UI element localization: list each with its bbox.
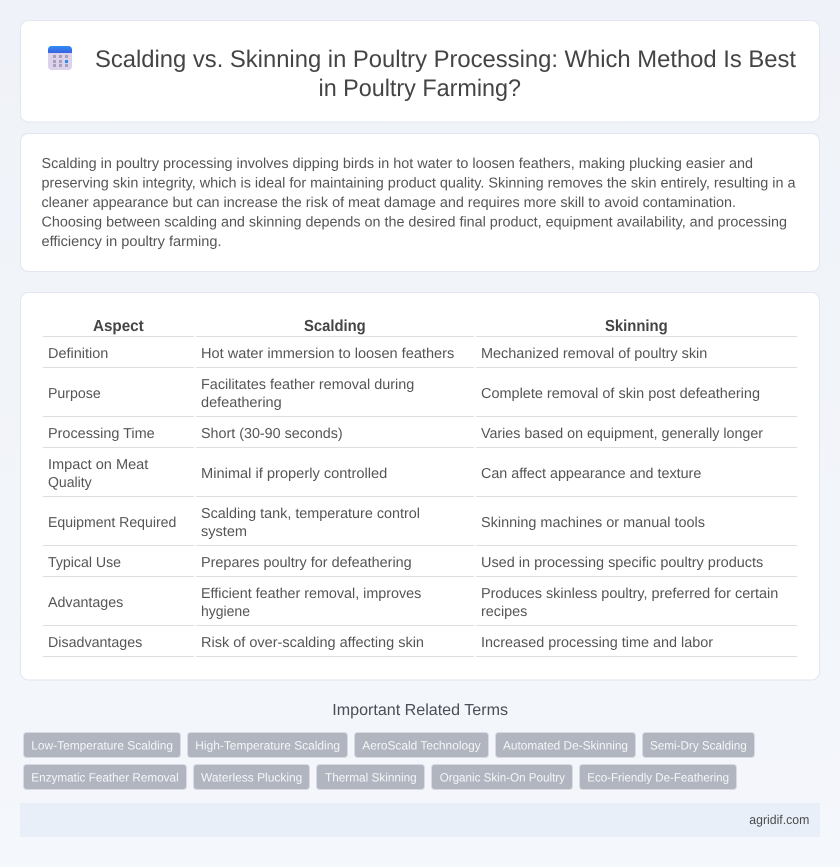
text block: introduction paragraph: [42, 156, 796, 250]
footer source label: agridif.com: [749, 812, 809, 827]
table row: equipment required: Scalding tank, temperature control: [201, 506, 420, 522]
table row: impact on meat quality: Impact on Meat: [48, 457, 148, 473]
panel: introduction: [20, 134, 820, 272]
table row: definition: Hot water immersion to loosen feathers: [201, 346, 454, 362]
tag: semi-dry scalding: Semi-Dry Scalding: [650, 738, 747, 752]
table row: impact on meat quality: [48, 457, 701, 491]
heading: important related terms: Important Related Terms: [332, 702, 508, 719]
tag: eco-friendly de-feathering: Eco-Friendly De-Feathering: [587, 770, 729, 784]
table row: typical use: Prepares poultry for defeathering: [201, 555, 412, 571]
tag: organic skin-on poultry: [432, 764, 572, 790]
table row: processing time: Short (30-90 seconds): [201, 426, 343, 442]
table row: definition: Mechanized removal of poultry skin: [481, 346, 707, 362]
table row: advantages: Produces skinless poultry, preferred for certain: [481, 586, 778, 602]
tag: automated de-skinning: Automated De-Skinning: [503, 738, 628, 752]
table row: impact on meat quality: Can affect appearance and texture: [481, 466, 701, 482]
table row: equipment required: Equipment Required: [48, 515, 176, 531]
table row: impact on meat quality: Quality: [48, 475, 92, 491]
tag: enzymatic feather removal: Enzymatic Feather Removal: [31, 770, 179, 784]
panel: title header: [20, 20, 820, 122]
tag: semi-dry scalding: [642, 732, 754, 758]
table row: disadvantages: Disadvantages: [48, 635, 142, 651]
table header row: Skinning: [605, 318, 668, 335]
table row: purpose: defeathering: [201, 395, 282, 411]
table header row: Aspect: [93, 318, 144, 335]
text block: introduction paragraph: efficiency in poultry farming.: [42, 234, 222, 250]
tag: low-temperature scalding: Low-Temperature Scalding: [31, 738, 173, 752]
title: in Poultry Farming?: [318, 75, 521, 102]
table row: typical use: Typical Use: [48, 555, 121, 571]
table row: advantages: Efficient feather removal, improves: [201, 586, 421, 602]
tag: high-temperature scalding: High-Temperature Scalding: [195, 738, 340, 752]
text block: introduction paragraph: Choosing between scalding and skinning depends on the desired final product, equipment availability, and processing: [42, 214, 787, 230]
table row: advantages: hygiene: [201, 604, 250, 620]
table row: equipment required: [48, 506, 705, 540]
table row: purpose: [48, 377, 760, 411]
footer bar: [20, 803, 820, 837]
table row: typical use: Used in processing specific poultry products: [481, 555, 763, 571]
table row: disadvantages: Increased processing time and labor: [481, 635, 713, 651]
tag: aeroscald technology: AeroScald Technology: [362, 738, 481, 752]
table row: impact on meat quality: Minimal if properly controlled: [201, 466, 387, 482]
tag: waterless plucking: Waterless Plucking: [201, 770, 302, 784]
icon: calendar: [48, 46, 72, 70]
table row: disadvantages: Risk of over-scalding affecting skin: [201, 635, 424, 651]
tag: organic skin-on poultry: Organic Skin-On Poultry: [440, 770, 565, 784]
table row: advantages: Advantages: [48, 595, 123, 611]
tag: aeroscald technology: [354, 732, 488, 758]
text block: introduction paragraph: Scalding in poultry processing involves dipping birds in hot water to loosen feathers, making plucking easier and: [42, 156, 753, 172]
table row: typical use: [48, 555, 763, 571]
tag: high-temperature scalding: [188, 732, 348, 758]
table row: purpose: Purpose: [48, 386, 101, 402]
text block: introduction paragraph: preserving skin integrity, which is ideal for maintaining product quality. Skinning removes the skin entirely, resulting in a: [42, 176, 796, 192]
table row: advantages: recipes: [481, 604, 527, 620]
table row: disadvantages: [48, 635, 713, 651]
title: [95, 46, 796, 102]
tag: eco-friendly de-feathering: [580, 764, 736, 790]
table row: advantages: [48, 586, 778, 620]
table row: processing time: [48, 426, 763, 442]
table row: equipment required: Skinning machines or manual tools: [481, 515, 705, 531]
panel: comparison table: [20, 292, 820, 680]
panel: related term tags: [24, 732, 754, 790]
tag: waterless plucking: [194, 764, 310, 790]
table row: definition: Definition: [48, 346, 108, 362]
tag: thermal skinning: Thermal Skinning: [325, 770, 417, 784]
table header row: [93, 318, 668, 335]
tag: automated de-skinning: [496, 732, 636, 758]
text block: introduction paragraph: cleaner appearance but can increase the risk of meat damage and requires more skill to avoid contamination.: [42, 195, 736, 211]
table row: definition: [48, 346, 707, 362]
table row: processing time: Processing Time: [48, 426, 155, 442]
table header row: Scalding: [304, 318, 366, 335]
title: Scalding vs. Skinning in Poultry Processing: Which Method Is Best: [95, 46, 796, 73]
table row: equipment required: system: [201, 524, 247, 540]
table row: purpose: Facilitates feather removal during: [201, 377, 414, 393]
tag: enzymatic feather removal: [24, 764, 186, 790]
table row: purpose: Complete removal of skin post defeathering: [481, 386, 760, 402]
tag: low-temperature scalding: [24, 732, 180, 758]
tag: thermal skinning: [316, 764, 424, 790]
table row: processing time: Varies based on equipment, generally longer: [481, 426, 763, 442]
